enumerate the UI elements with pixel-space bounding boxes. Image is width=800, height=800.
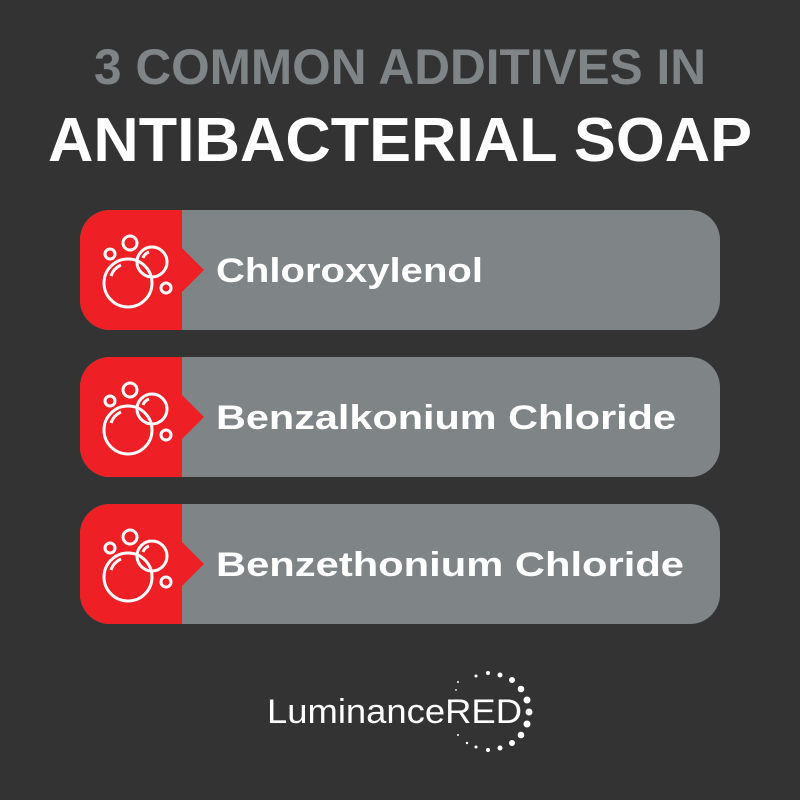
logo [267, 671, 532, 752]
card: Chloroxylenol: Chloroxylenol [216, 252, 483, 290]
title line 1: 3 COMMON ADDITIVES IN [94, 39, 706, 95]
logo: LuminanceRED [267, 693, 522, 731]
title line 2: ANTIBACTERIAL SOAP [48, 106, 752, 175]
card: Benzalkonium Chloride [80, 357, 720, 477]
card: Benzalkonium Chloride: Benzalkonium Chloride [216, 399, 676, 437]
card: Chloroxylenol [80, 210, 720, 330]
card: Benzethonium Chloride [80, 504, 720, 624]
card: Benzethonium Chloride: Benzethonium Chloride [216, 546, 684, 584]
